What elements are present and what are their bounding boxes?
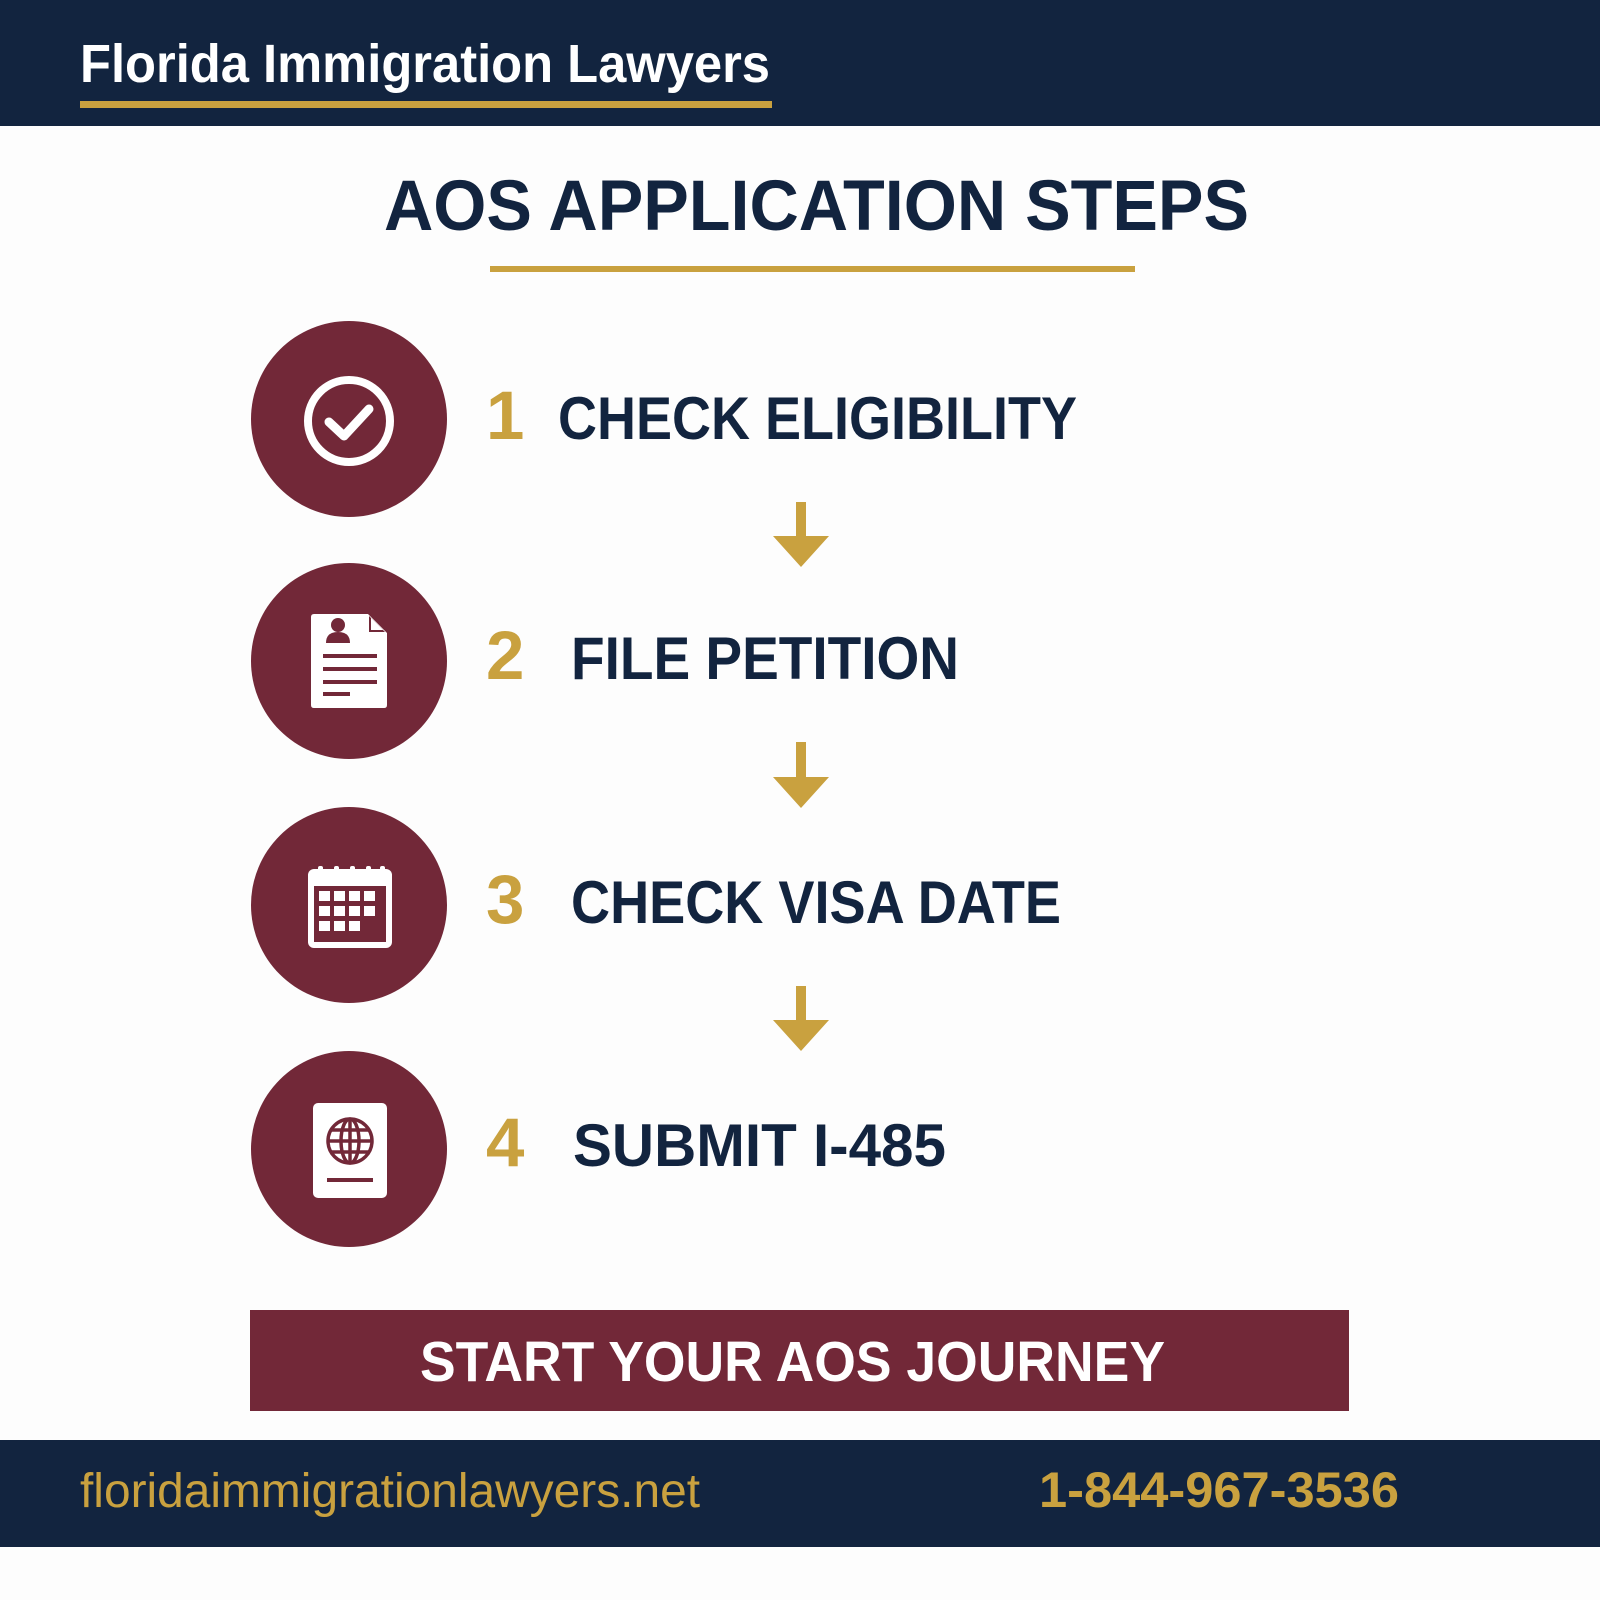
label: SUBMIT I-485 (573, 1112, 946, 1179)
arrow 1 (773, 502, 829, 567)
call to action button: START YOUR AOS JOURNEY (420, 1330, 1165, 1394)
label: CHECK VISA DATE (571, 869, 1061, 936)
website: floridaimmigrationlawyers.net (80, 1465, 700, 1518)
footer bar (0, 1440, 1600, 1547)
arrow 2 (773, 742, 829, 808)
step 1 (251, 321, 1077, 517)
header title: Florida Immigration Lawyers (80, 34, 770, 94)
arrow 3 (773, 986, 829, 1051)
label: CHECK ELIGIBILITY (558, 385, 1077, 452)
step 4 (251, 1051, 946, 1247)
number 2: 2 (486, 617, 524, 694)
icon: passport (251, 1051, 447, 1247)
number 3: 3 (486, 861, 524, 938)
number 1: 1 (486, 377, 524, 454)
main title: AOS APPLICATION STEPS (384, 167, 1249, 246)
icon: calendar (251, 807, 447, 1003)
step 2 (251, 563, 959, 759)
step 3 (251, 807, 1061, 1003)
call to action button (250, 1310, 1349, 1411)
number 4: 4 (486, 1104, 524, 1181)
icon: check circle (251, 321, 447, 517)
label: FILE PETITION (571, 625, 959, 692)
phone: 1-844-967-3536 (1039, 1462, 1399, 1518)
icon: document (251, 563, 447, 759)
header bar (0, 0, 1600, 126)
